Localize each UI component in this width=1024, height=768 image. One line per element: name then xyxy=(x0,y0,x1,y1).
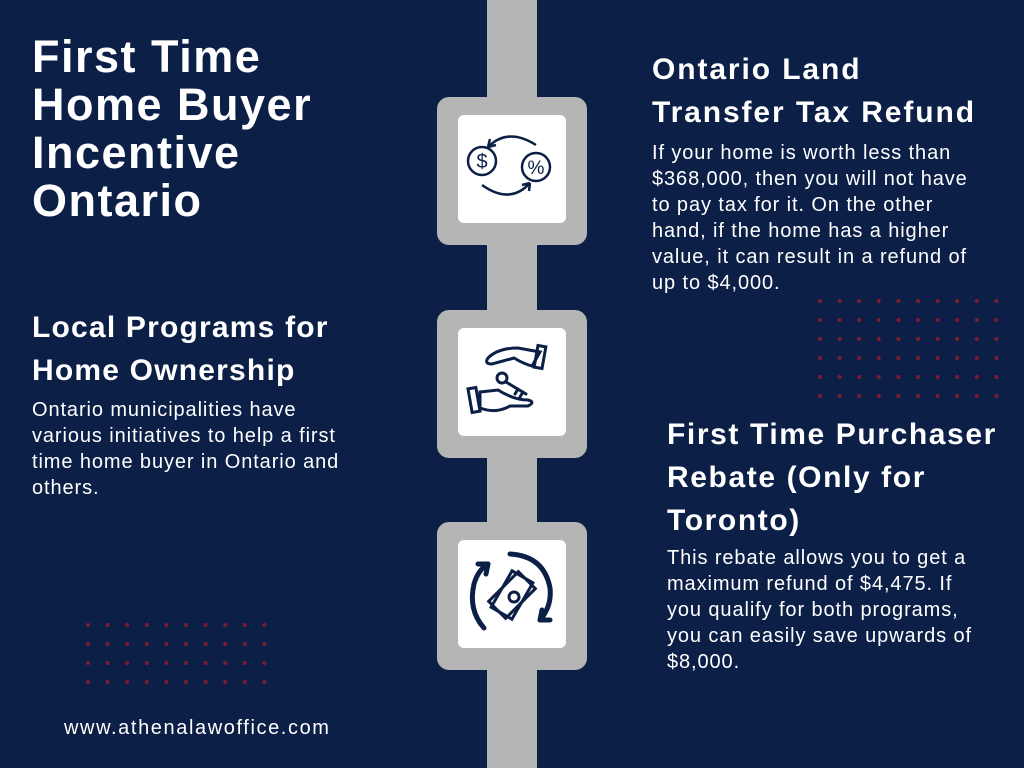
text: land transfer: If your home is worth less than xyxy=(652,142,951,164)
heading: land transfer: Transfer Tax Refund xyxy=(652,96,976,129)
heading: purchaser rebate: Rebate (Only for xyxy=(667,461,926,494)
text: local programs: various initiatives to help a first xyxy=(32,425,336,447)
icon box: dollar percent exchange: $ xyxy=(476,151,488,173)
heading: land transfer xyxy=(652,53,976,129)
text: local programs: time home buyer in Ontario and xyxy=(32,451,339,473)
heading: local programs: Home Ownership xyxy=(32,354,296,387)
title: Incentive xyxy=(32,127,241,178)
heading: purchaser rebate: First Time Purchaser xyxy=(667,418,997,451)
heading: local programs: Local Programs for xyxy=(32,311,329,344)
icon box: hands with key xyxy=(437,310,587,458)
text: purchaser rebate: maximum refund of $4,475. If xyxy=(667,573,952,595)
text: local programs: Ontario municipalities have xyxy=(32,399,296,421)
heading: purchaser rebate: Toronto) xyxy=(667,504,801,537)
heading: local programs xyxy=(32,311,329,387)
website url: www.athenalawoffice.com xyxy=(64,717,331,739)
title: First Time xyxy=(32,31,261,82)
title: Ontario xyxy=(32,175,203,226)
text: local programs xyxy=(32,399,339,499)
icon box: money cycle xyxy=(437,522,587,670)
icon box: dollar percent exchange: % xyxy=(528,158,545,179)
dots pattern right xyxy=(818,299,999,398)
text: purchaser rebate: $8,000. xyxy=(667,651,740,673)
text: land transfer: value, it can result in a refund of xyxy=(652,246,967,268)
text: land transfer xyxy=(652,142,968,294)
text: purchaser rebate xyxy=(667,547,972,673)
vertical strip xyxy=(487,0,537,768)
text: land transfer: $368,000, then you will not have xyxy=(652,168,968,190)
text: purchaser rebate: you qualify for both programs, xyxy=(667,599,959,621)
text: land transfer: hand, if the home has a higher xyxy=(652,220,949,242)
icon box: dollar percent exchange xyxy=(437,97,587,245)
text: land transfer: to pay tax for it. On the other xyxy=(652,194,933,216)
heading: purchaser rebate xyxy=(667,418,997,537)
dots pattern left xyxy=(86,623,267,684)
title: Home Buyer xyxy=(32,79,312,130)
text: purchaser rebate: you can easily save upwards of xyxy=(667,625,972,647)
text: local programs: others. xyxy=(32,477,99,499)
text: purchaser rebate: This rebate allows you to get a xyxy=(667,547,966,569)
text: land transfer: up to $4,000. xyxy=(652,272,780,294)
title xyxy=(32,31,312,226)
heading: land transfer: Ontario Land xyxy=(652,53,861,86)
